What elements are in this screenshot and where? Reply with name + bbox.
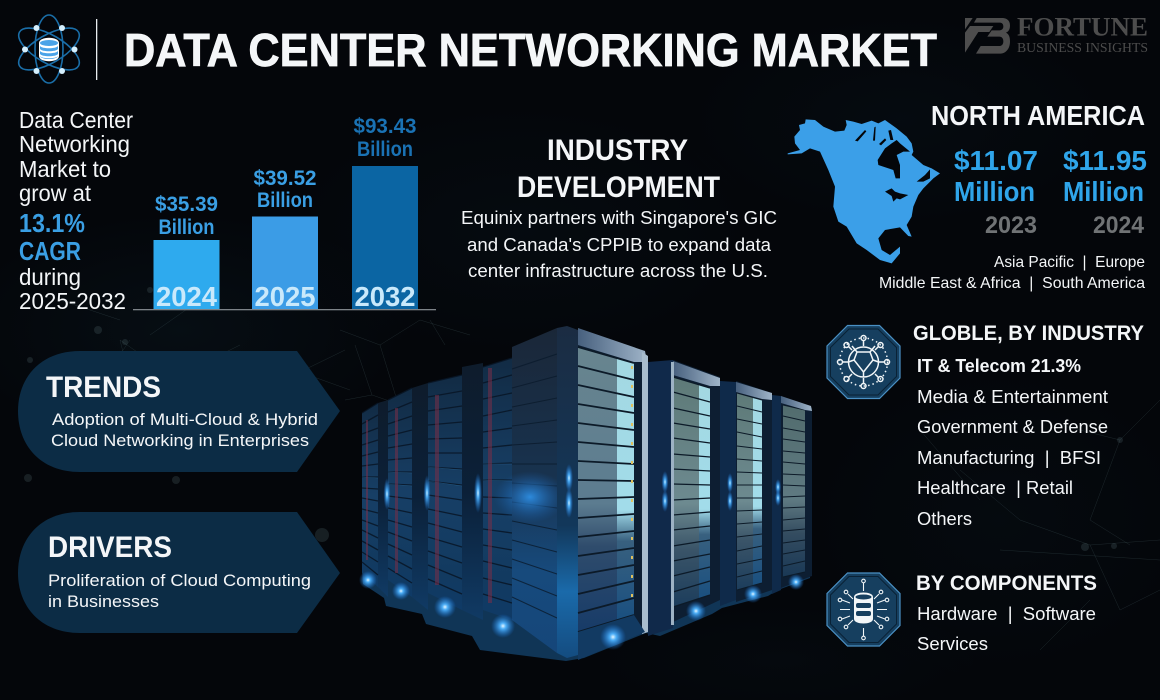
panel: global by industry: GLOBLE, BY INDUSTRY <box>913 322 1144 345</box>
logo: Fortune Business Insights <box>965 12 1148 55</box>
text block: CAGR growth: grow at <box>19 180 92 206</box>
panel: North America figures: 2023 <box>985 212 1037 239</box>
panel: trends: TRENDS <box>46 371 161 404</box>
panel: industry development: Equinix partners with Singapore's GIC <box>461 208 777 228</box>
panel: North America figures: Million <box>1063 176 1144 207</box>
panel: global by industry: IT & Telecom 21.3% <box>917 356 1081 376</box>
icon: network hub octagon <box>827 326 900 398</box>
panel: North America figures: Middle East & Africa | South America <box>879 275 1145 292</box>
text block: CAGR growth: 13.1% <box>19 208 85 238</box>
text block: CAGR growth: 2025-2032 <box>19 288 126 314</box>
panel: by components: Services <box>917 634 988 654</box>
panel: North America figures <box>879 100 1147 292</box>
panel: trends <box>18 351 340 472</box>
bar chart: 2025 <box>254 281 316 312</box>
bar chart: $35.39 <box>155 193 218 216</box>
map: North America <box>788 119 940 263</box>
text block: CAGR growth <box>19 107 133 314</box>
panel: global by industry: Government & Defense <box>917 417 1108 437</box>
bar chart <box>133 115 436 312</box>
bar chart: $93.43 <box>354 115 416 138</box>
panel: trends: Adoption of Multi-Cloud & Hybrid <box>52 410 318 429</box>
header divider <box>96 19 97 80</box>
panel: drivers: in Businesses <box>48 592 159 611</box>
panel: drivers: Proliferation of Cloud Computing <box>48 571 311 590</box>
header icon: database orbit <box>13 15 85 83</box>
text block: CAGR growth: Networking <box>19 131 130 157</box>
bar chart: $39.52 <box>254 167 316 190</box>
panel: drivers: DRIVERS <box>48 531 172 564</box>
panel: drivers <box>18 512 340 633</box>
panel: global by industry: Manufacturing | BFSI <box>917 448 1101 468</box>
panel: global by industry: Others <box>917 509 972 529</box>
panel: North America figures: $11.95 <box>1063 145 1147 176</box>
panel: industry development: INDUSTRY <box>547 134 688 167</box>
panel: by components: Hardware | Software <box>917 604 1096 624</box>
text block: CAGR growth: Market to <box>19 156 111 182</box>
panel: North America figures: 2024 <box>1093 212 1145 239</box>
title: DATA CENTER NETWORKING MARKET <box>124 24 937 76</box>
panel: global by industry <box>913 322 1144 529</box>
panel: industry development: center infrastructure across the U.S. <box>468 261 768 281</box>
panel: industry development <box>461 134 777 281</box>
logo: Fortune Business Insights: FORTUNE <box>1017 12 1148 42</box>
bar chart: 2032 <box>354 281 416 312</box>
panel: by components <box>916 572 1097 654</box>
server racks illustration <box>359 326 812 661</box>
bar chart: Billion <box>357 138 413 161</box>
bar chart: 2024 <box>156 281 217 312</box>
panel: industry development: and Canada's CPPIB to expand data <box>467 235 772 255</box>
panel: North America figures: Asia Pacific | Europe <box>994 254 1145 271</box>
text block: CAGR growth: Data Center <box>19 107 133 133</box>
panel: North America figures: Million <box>954 176 1035 207</box>
bar chart: Billion <box>257 189 313 212</box>
icon: database components octagon <box>827 573 900 646</box>
panel: by components: BY COMPONENTS <box>916 572 1097 595</box>
bar chart: Billion <box>158 216 214 239</box>
text block: CAGR growth: during <box>19 264 81 290</box>
text block: CAGR growth: CAGR <box>19 236 81 266</box>
panel: trends: Cloud Networking in Enterprises <box>51 431 309 450</box>
panel: North America figures: $11.07 <box>954 145 1038 176</box>
panel: global by industry: Media & Entertainment <box>917 387 1108 407</box>
logo: Fortune Business Insights: BUSINESS INSIGHTS <box>1017 40 1148 55</box>
panel: industry development: DEVELOPMENT <box>517 171 720 204</box>
panel: global by industry: Healthcare | Retail <box>917 478 1073 498</box>
